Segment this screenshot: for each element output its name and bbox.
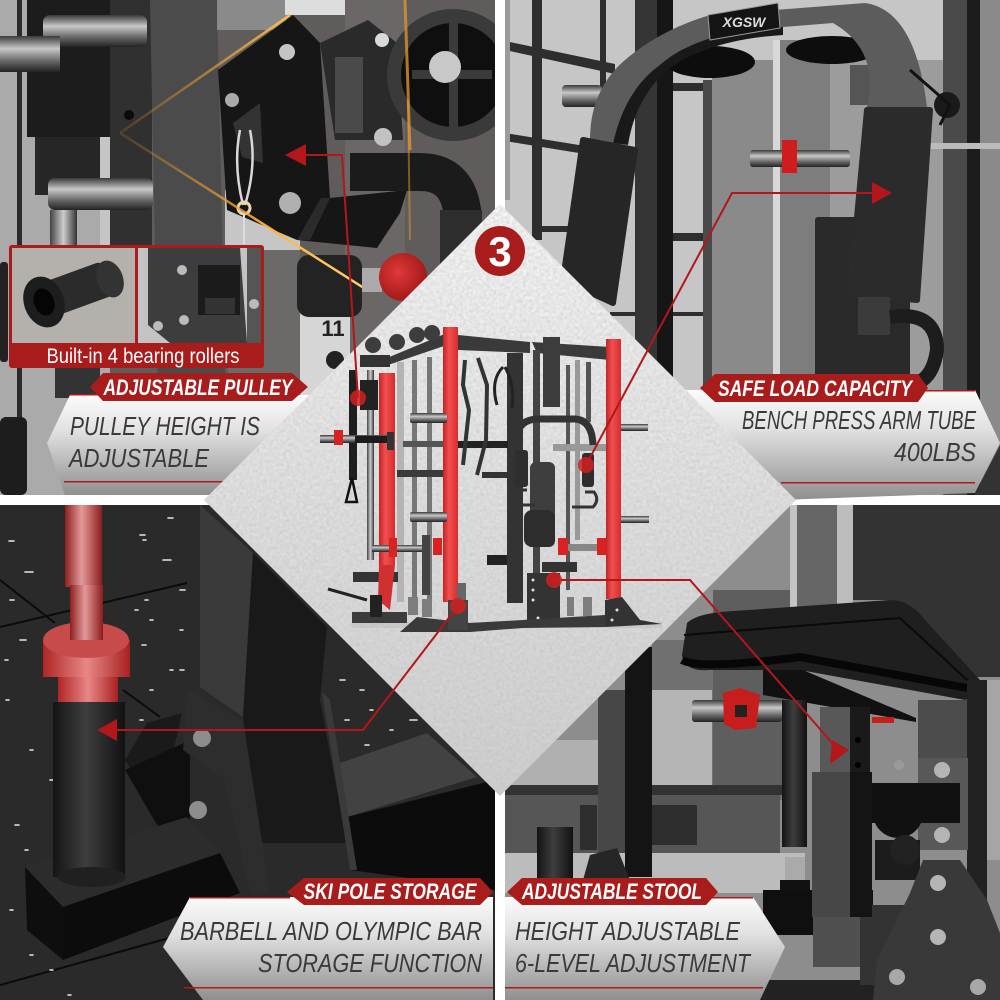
label: ski pole storage: SKI POLE STORAGE (304, 879, 478, 904)
callout: adjustable pulley (47, 373, 320, 495)
icon: red ball knob (362, 253, 427, 301)
icon: bearing roller (12, 248, 135, 343)
arm frame and seat (517, 419, 593, 457)
arrow: stool pointer (546, 572, 849, 764)
panel: adjustable stool photo (505, 505, 1000, 1000)
callout: adjustable stool: 6-LEVEL ADJUSTMENT (515, 948, 752, 978)
icon: red barbell sleeve (43, 505, 130, 887)
light streaks (120, 0, 410, 290)
callout: adjustable pulley: ADJUSTABLE (67, 443, 210, 473)
icon: smith machine (320, 325, 662, 632)
callout: adjustable pulley: PULLEY HEIGHT IS (70, 411, 261, 441)
icon: roller bracket (138, 248, 261, 343)
left tower (367, 370, 374, 560)
icon: weight bar with red collar (562, 85, 1000, 173)
back rods and columns (507, 353, 523, 603)
floor shadow (352, 622, 662, 628)
panel: centre diamond with machine (204, 204, 796, 796)
arrow: arm tube pointer (578, 182, 892, 473)
panel: ski pole storage photo (0, 505, 495, 1000)
stool (542, 562, 577, 572)
callout: built-in bearing rollers: Built-in 4 bearing rollers (46, 345, 240, 368)
curl bar handles (463, 358, 487, 475)
callout: adjustable stool (505, 878, 785, 1000)
bars (320, 435, 390, 443)
icon: frame upright (25, 505, 495, 960)
base (400, 615, 605, 632)
callout: safe load capacity (680, 374, 1000, 500)
logo badge (708, 3, 780, 40)
icon: padded stool seat (682, 600, 1000, 1000)
arrow: pulley pointer (285, 144, 366, 406)
plates (0, 262, 8, 362)
icon: red collar (692, 688, 894, 730)
label: adjustable stool: ADJUSTABLE STOOL (521, 879, 702, 904)
red columns (379, 373, 395, 565)
back beams (458, 335, 530, 353)
logo badge: XGSW (722, 14, 767, 30)
callout: ski pole storage: STORAGE FUNCTION (258, 948, 482, 978)
arrow: ski pole pointer (97, 598, 466, 741)
icon: weight plate wheel (387, 9, 495, 141)
label: safe load capacity: SAFE LOAD CAPACITY (718, 376, 914, 401)
icon: pulley bracket (218, 15, 407, 317)
callout: safe load capacity: 400LBS (894, 437, 977, 467)
label: adjustable pulley: ADJUSTABLE PULLEY (103, 375, 294, 400)
callout: built-in bearing rollers (9, 245, 264, 368)
callout: ski pole storage (163, 878, 493, 1000)
badge: number 3 (475, 226, 525, 276)
panel: adjustable pulley photo (0, 0, 519, 495)
badge: number 3: 3 (488, 228, 512, 275)
icon: arm pad frame (563, 3, 960, 383)
icon: curved pipe handle (350, 172, 463, 225)
callout: ski pole storage: BARBELL AND OLYMPIC BAR (180, 916, 482, 946)
icon: weight pegs (0, 15, 153, 248)
label number 11: 11 (321, 316, 345, 341)
callout: adjustable stool: HEIGHT ADJUSTABLE (515, 916, 741, 946)
panel: safe load capacity photo (505, 0, 1000, 495)
